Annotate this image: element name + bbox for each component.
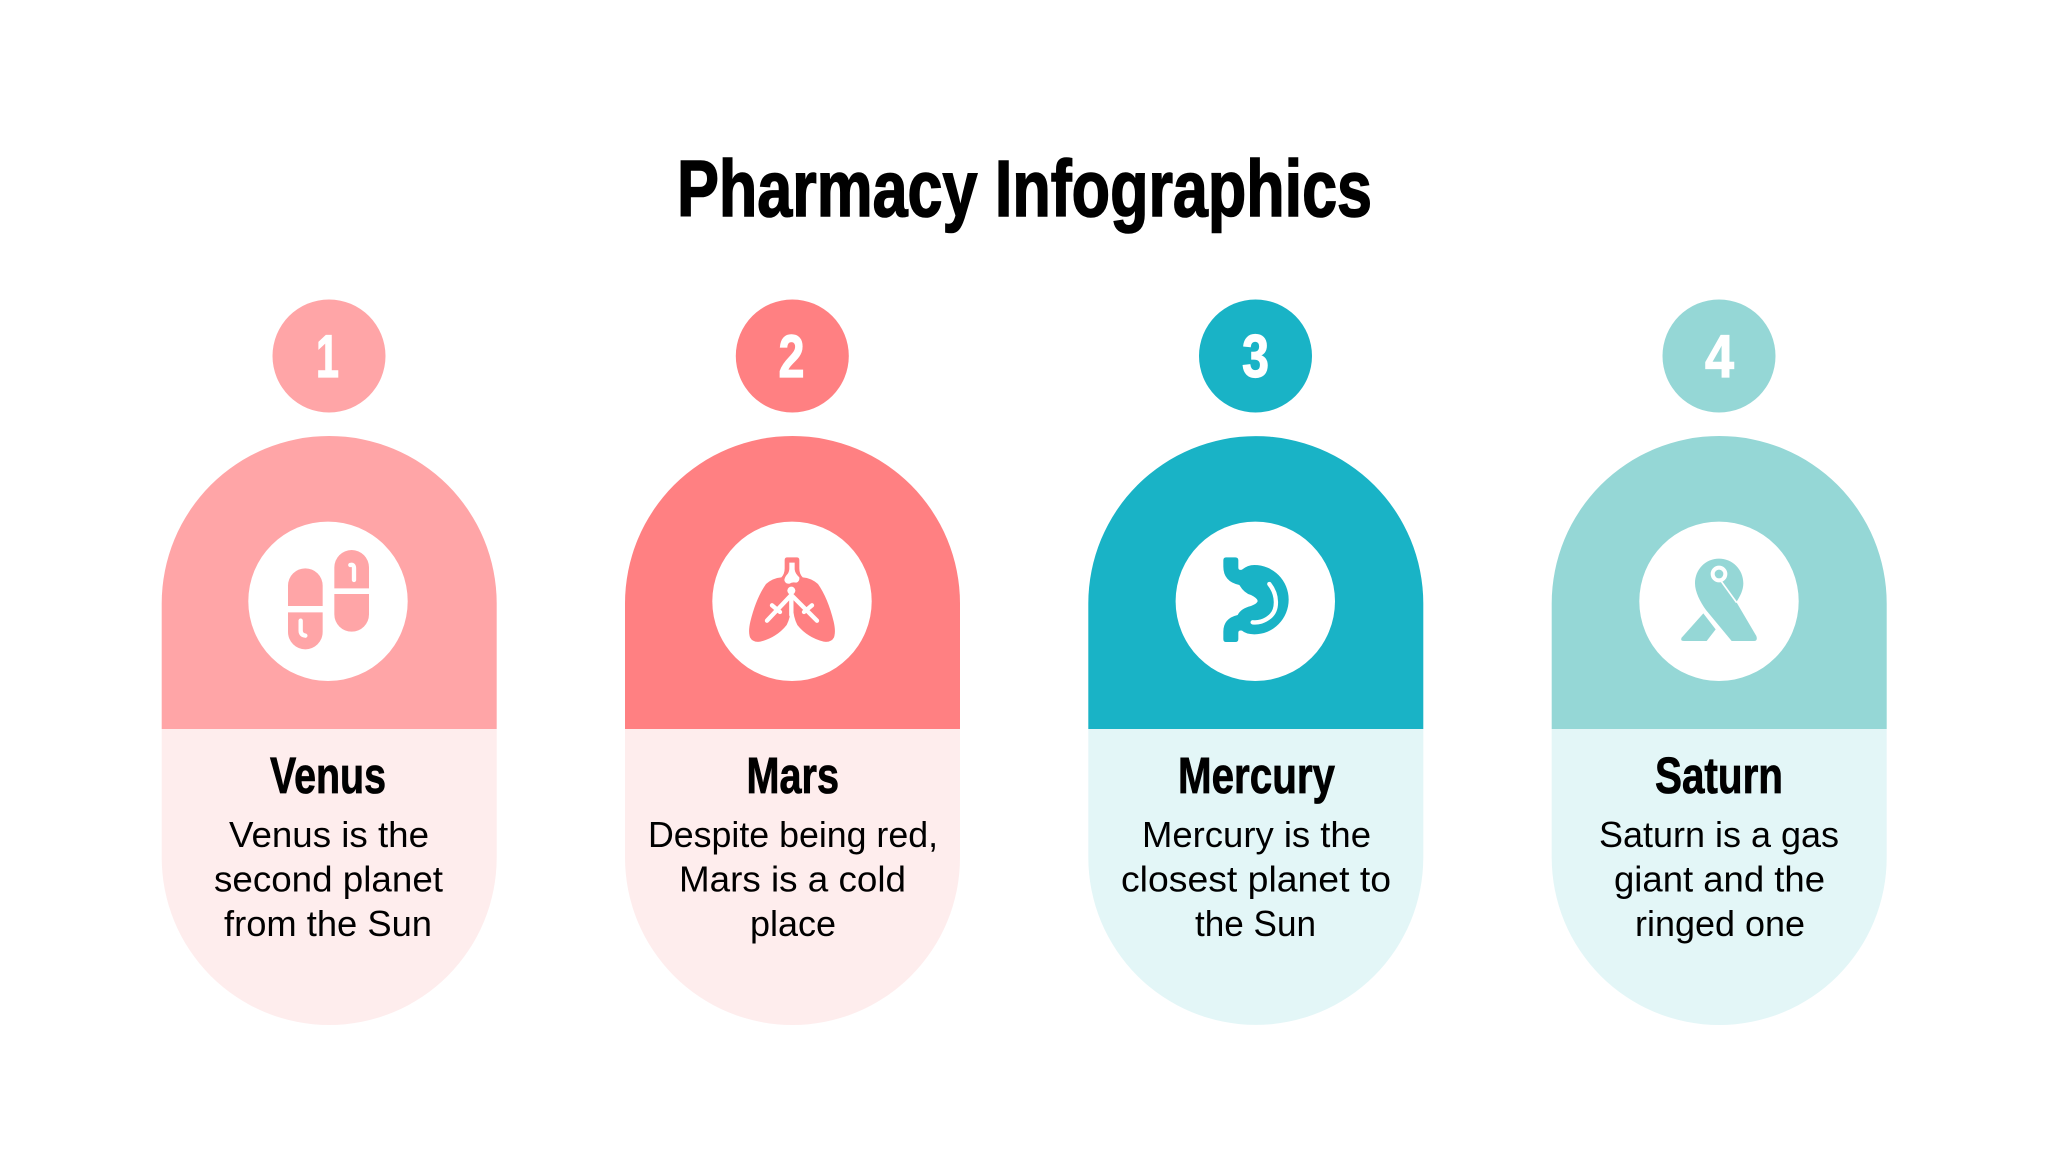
description: Mars: Despite being red, (648, 814, 938, 855)
number badge 2 (736, 300, 849, 412)
number badge 1: 1 (316, 323, 339, 390)
panel: Venus (162, 300, 497, 1025)
icon: ribbon (1639, 522, 1799, 681)
panel: Mercury (1088, 300, 1423, 1025)
description: Mars (648, 814, 938, 944)
description: Venus: Venus is the (229, 814, 429, 855)
capsule bottom (625, 729, 960, 1025)
capsule top (625, 436, 960, 729)
icon: stomach (1176, 522, 1335, 681)
number badge 4: 4 (1705, 323, 1735, 390)
title: Pharmacy Infographics (677, 144, 1372, 233)
number badge 1 (272, 300, 386, 412)
description: Mars: Mars is a cold (679, 858, 906, 900)
description: Venus (214, 814, 443, 944)
icon: pills (248, 522, 408, 681)
number badge 2: 2 (778, 323, 804, 390)
description: Saturn: Saturn is a gas (1599, 814, 1839, 855)
heading: Venus: Venus (270, 747, 386, 804)
description: Mercury: the Sun (1195, 903, 1316, 944)
capsule top (1552, 436, 1887, 729)
panel: Mars (625, 300, 960, 1025)
number badge 3: 3 (1242, 323, 1269, 390)
description: Saturn: giant and the (1614, 858, 1825, 900)
description: Mercury: closest planet to (1121, 858, 1391, 900)
capsule top (1088, 436, 1423, 729)
description: Mercury: Mercury is the (1142, 814, 1371, 855)
description: Mars: place (750, 903, 836, 944)
description: Mercury (1121, 814, 1391, 944)
heading: Mercury: Mercury (1178, 747, 1336, 804)
description: Venus: from the Sun (224, 903, 432, 944)
number badge 3 (1199, 300, 1312, 412)
capsule top (162, 436, 497, 729)
capsule bottom (1088, 729, 1423, 1025)
heading: Mars: Mars (746, 747, 839, 804)
description: Saturn: ringed one (1635, 903, 1805, 944)
capsule bottom (1552, 729, 1887, 1025)
description: Saturn (1599, 814, 1839, 944)
capsule bottom (162, 729, 497, 1025)
description: Venus: second planet (214, 858, 443, 900)
panel: Saturn (1552, 300, 1887, 1025)
heading: Saturn: Saturn (1655, 747, 1783, 804)
number badge 4 (1662, 300, 1776, 412)
icon: lungs (712, 522, 872, 681)
